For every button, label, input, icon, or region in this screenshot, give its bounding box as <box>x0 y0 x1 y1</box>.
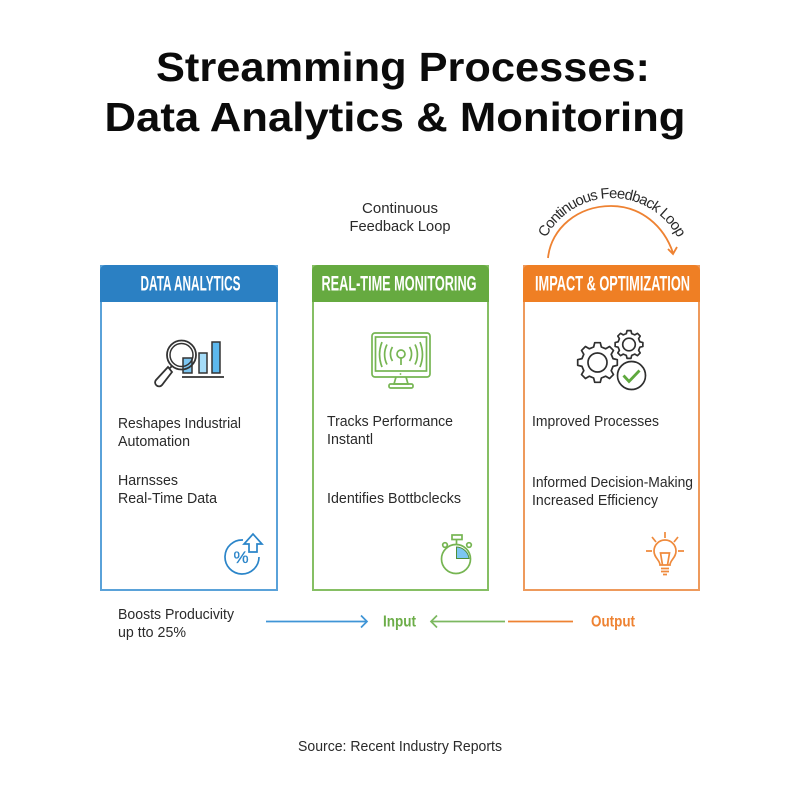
icon: stopwatch <box>442 535 471 574</box>
feedback loop label: plain: Feedback Loop <box>350 219 450 235</box>
icon: magnifier over bar chart <box>155 340 224 386</box>
text: reshapes <box>118 416 241 450</box>
title: Data Analytics & Monitoring <box>104 94 686 140</box>
heading: data analytics <box>100 265 278 302</box>
icon: gears with check <box>578 331 646 390</box>
text: harnesses <box>118 473 218 507</box>
source: Source: Recent Industry Reports <box>298 739 502 755</box>
heading: real-time monitoring: REAL-TIME MONITORING <box>322 272 476 296</box>
feedback loop arc with curved label <box>539 188 684 258</box>
text: decision making and efficiency <box>532 475 693 509</box>
text: tracks performance <box>327 414 453 448</box>
text: harnesses: Harnsses <box>118 473 178 489</box>
title: Streamming Processes: <box>156 44 650 90</box>
text: tracks performance: Tracks Performance <box>327 414 453 430</box>
panel: impact and optimization <box>523 265 700 590</box>
arrow: green to input <box>431 616 505 628</box>
feedback loop arc with curved label: Continuous Feedback Loop <box>539 188 684 236</box>
text: harnesses: Real-Time Data <box>118 491 218 507</box>
feedback loop label: plain: Continuous <box>362 201 438 217</box>
heading: impact and optimization <box>523 265 700 302</box>
line: orange <box>508 620 573 622</box>
text: boosts productivity <box>118 607 235 641</box>
icon: light bulb <box>646 532 684 574</box>
heading: real-time monitoring <box>312 265 489 302</box>
arrow: blue to input <box>266 616 367 628</box>
heading: data analytics: DATA ANALYTICS <box>140 272 240 296</box>
text: boosts productivity: up tto 25% <box>118 625 186 641</box>
label: input: Input <box>383 614 416 630</box>
panel: data analytics <box>100 265 278 590</box>
panel: real-time monitoring <box>312 265 489 590</box>
text: identifies: Identifies Bottbclecks <box>327 491 461 507</box>
text: tracks performance: Instantl <box>327 432 373 448</box>
title <box>104 44 686 140</box>
text: boosts productivity: Boosts Producivity <box>118 607 235 623</box>
label: output: Output <box>591 614 635 630</box>
feedback loop label: plain <box>350 201 450 235</box>
text: reshapes: Reshapes Industrial <box>118 416 241 432</box>
icon: monitor with signal <box>372 333 430 388</box>
text: improved processes: Improved Processes <box>532 414 659 430</box>
text: reshapes: Automation <box>118 434 190 450</box>
icon: percent with up arrow: % <box>233 548 249 567</box>
icon: percent with up arrow <box>225 534 262 574</box>
text: decision making and efficiency: Informed Decision-Making <box>532 475 693 491</box>
text: decision making and efficiency: Increased Efficiency <box>532 493 659 509</box>
heading: impact and optimization: IMPACT & OPTIMIZATION <box>535 272 690 296</box>
